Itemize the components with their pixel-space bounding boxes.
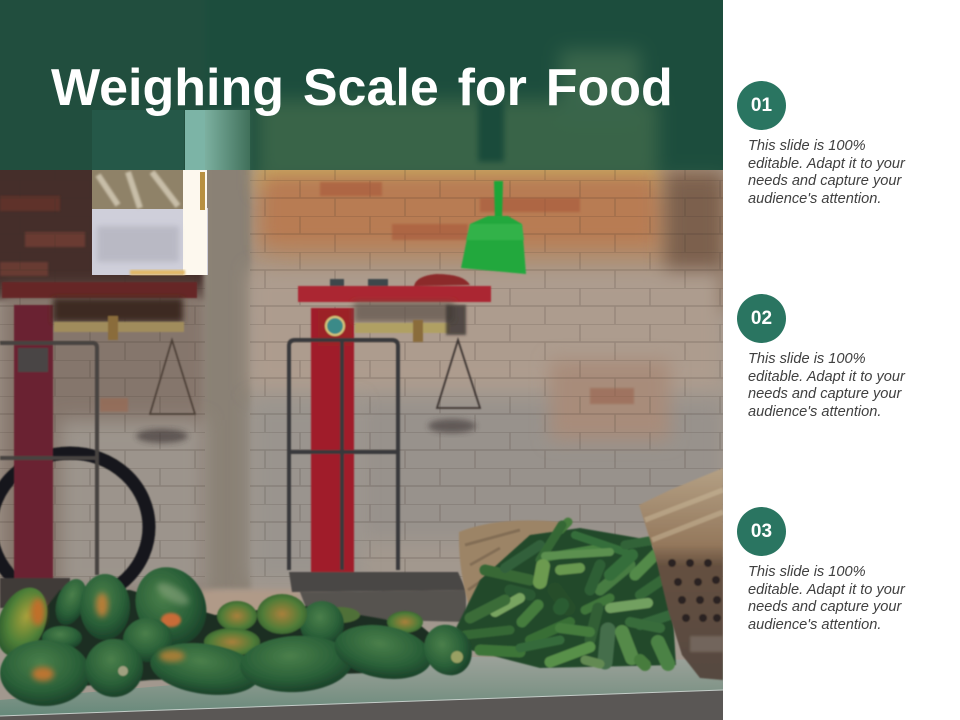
left basket <box>459 520 570 610</box>
number badge 03: 03 <box>751 521 772 542</box>
cucumber pile <box>456 522 676 668</box>
description 03: audience's attention. <box>748 617 881 633</box>
item 02 <box>737 294 906 420</box>
description 03 <box>748 564 906 633</box>
photo: market wall with weighing scales and vegetables <box>0 0 723 720</box>
number badge 02 <box>737 294 786 343</box>
description 03: This slide is 100% <box>748 564 866 580</box>
description 01: This slide is 100% <box>748 138 866 154</box>
description 01: editable. Adapt it to your <box>748 156 905 172</box>
description 01: needs and capture your <box>748 173 901 189</box>
right scale <box>289 274 491 622</box>
description 02: needs and capture your <box>748 386 901 402</box>
number badge 03 <box>737 507 786 556</box>
right basket <box>639 468 723 680</box>
papaya pile <box>0 555 481 706</box>
left scale <box>0 282 197 608</box>
description 02: editable. Adapt it to your <box>748 369 905 385</box>
sunlight showing through band <box>185 110 250 170</box>
description 02 <box>748 351 906 420</box>
description 02: This slide is 100% <box>748 351 866 367</box>
item 03 <box>737 507 906 633</box>
item 01 <box>737 81 906 207</box>
description 02: audience's attention. <box>748 404 881 420</box>
number badge 01: 01 <box>751 95 772 116</box>
wall background <box>0 0 743 720</box>
title: Weighing Scale for Food <box>51 59 673 117</box>
number badge 01 <box>737 81 786 130</box>
icon: green dustpan <box>461 181 526 274</box>
description 01 <box>748 138 906 207</box>
green title band <box>0 0 723 170</box>
ledge <box>0 657 723 720</box>
description 01: audience's attention. <box>748 191 881 207</box>
description 03: editable. Adapt it to your <box>748 582 905 598</box>
number badge 02: 02 <box>751 308 772 329</box>
calendar <box>92 110 208 275</box>
tire <box>0 453 149 601</box>
description 03: needs and capture your <box>748 599 901 615</box>
